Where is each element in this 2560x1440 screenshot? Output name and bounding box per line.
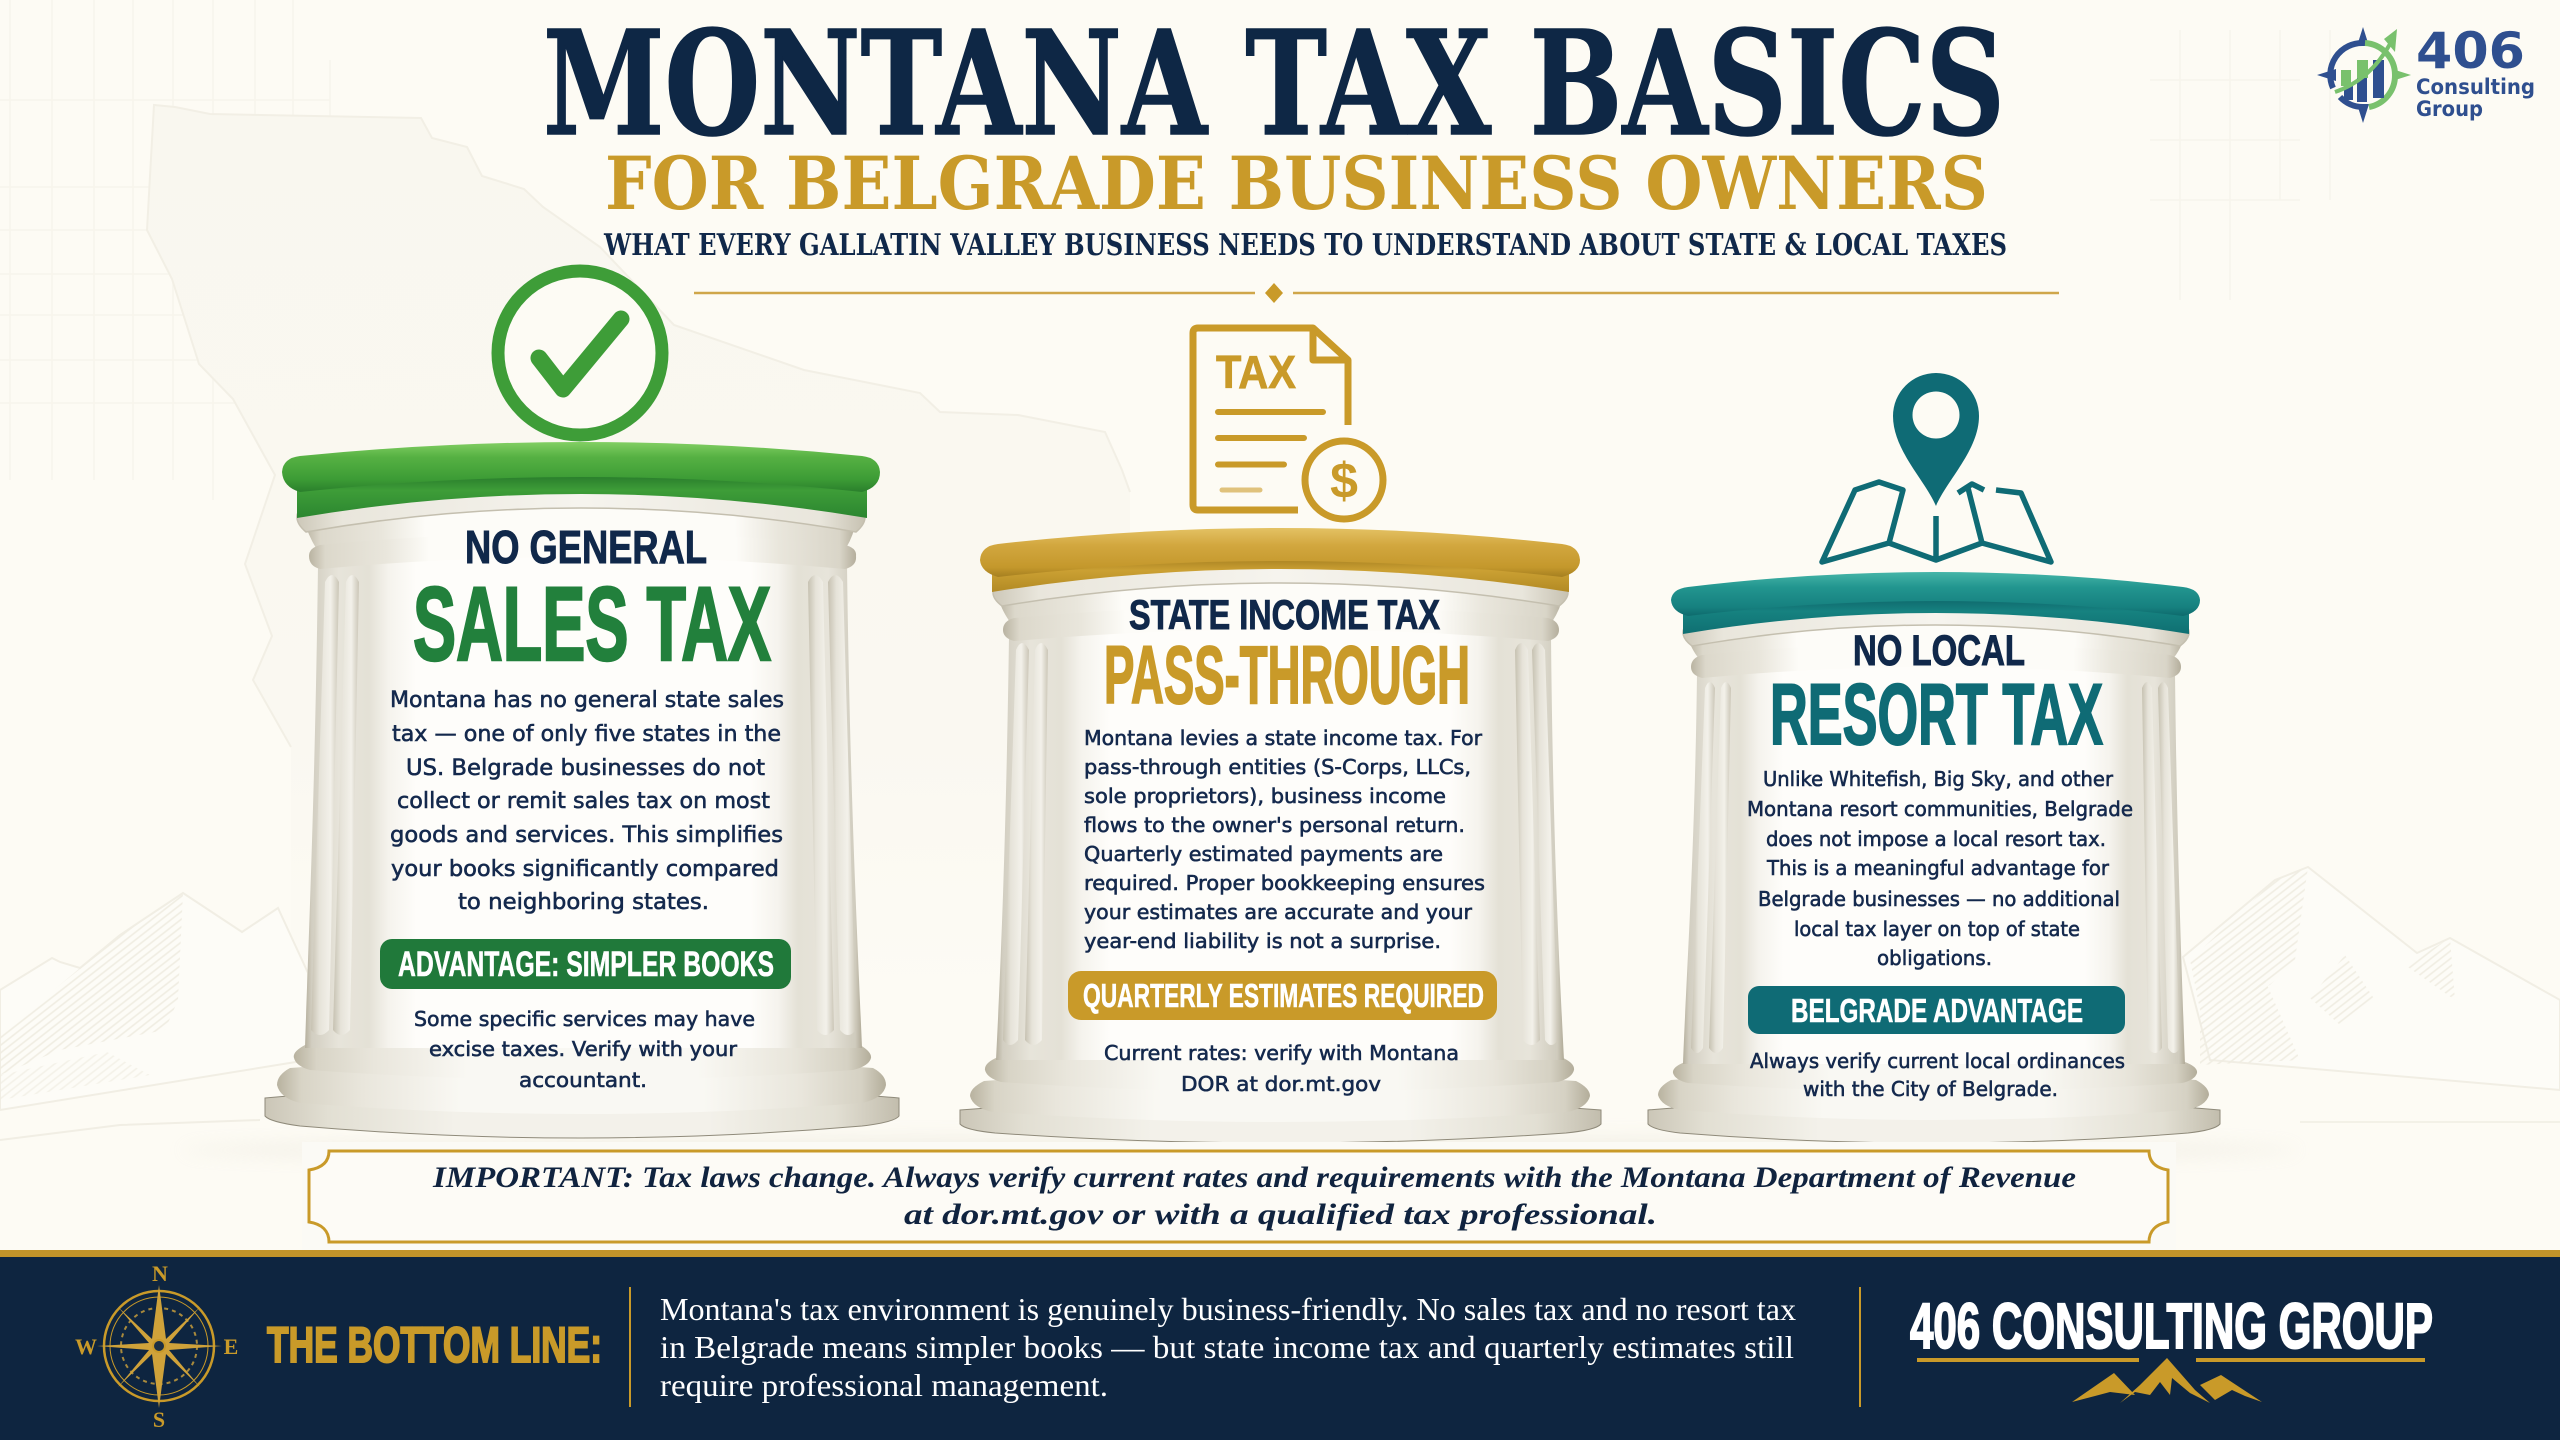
- body text: Montana has no general state sales: [390, 687, 784, 713]
- panel: state income tax pass-through: [960, 328, 1601, 1143]
- footnote: [1104, 1041, 1459, 1096]
- body text: [1747, 767, 2133, 970]
- logo wordmark: Consulting: [2416, 75, 2535, 99]
- body text: Unlike Whitefish, Big Sky, and other: [1763, 767, 2114, 791]
- icon: tax document with dollar coin: $: [1330, 453, 1358, 509]
- badge: [1748, 986, 2125, 1034]
- body text: tax — one of only five states in the: [392, 721, 781, 747]
- logo wordmark: Group: [2416, 97, 2483, 121]
- summary text: Montana's tax environment is genuinely business-friendly. No sales tax and no resort tax: [660, 1291, 1796, 1327]
- highlight title: PASS-THROUGH: [1104, 630, 1470, 721]
- body text: year-end liability is not a surprise.: [1084, 929, 1441, 953]
- bottom line label: THE BOTTOM LINE:: [267, 1317, 602, 1373]
- footnote: [1750, 1049, 2125, 1101]
- footnote: Always verify current local ordinances: [1750, 1049, 2125, 1073]
- ornamental divider: [694, 283, 2059, 303]
- icon: compass rose: [75, 1261, 238, 1432]
- ground shadows: [180, 1136, 2300, 1164]
- heading: NO GENERAL: [465, 521, 707, 573]
- body text: [1084, 726, 1485, 953]
- badge: [380, 939, 791, 989]
- background: left mountains: [0, 893, 308, 1140]
- column structure: [960, 566, 1601, 1143]
- body text: [390, 687, 784, 915]
- body text: local tax layer on top of state: [1794, 917, 2080, 941]
- footnote: excise taxes. Verify with your: [429, 1037, 738, 1061]
- heading: NO LOCAL: [1853, 627, 2025, 675]
- badge: [1068, 971, 1497, 1020]
- badge: BELGRADE ADVANTAGE: [1791, 992, 2083, 1029]
- column structure: [265, 490, 899, 1138]
- logo wordmark: 406: [2416, 22, 2525, 80]
- tagline: WHAT EVERY GALLATIN VALLEY BUSINESS NEEDS TO UNDERSTAND ABOUT STATE & LOCAL TAXES: [603, 228, 2007, 263]
- body text: This is a meaningful advantage for: [1766, 856, 2110, 880]
- body text: Montana levies a state income tax. For: [1084, 726, 1483, 750]
- body text: Montana resort communities, Belgrade: [1747, 797, 2133, 821]
- footer band: [0, 1250, 2560, 1440]
- body text: obligations.: [1877, 946, 1992, 970]
- column structure: [1648, 608, 2220, 1143]
- title: MONTANA TAX BASICS: [543, 0, 2005, 168]
- icon: compass rose: S: [153, 1407, 165, 1432]
- background: right mountains: [2183, 867, 2560, 1122]
- brand wordmark with mountains: [1910, 1290, 2433, 1403]
- body text: to neighboring states.: [458, 889, 709, 915]
- logo: 406 Consulting Group: [2317, 22, 2535, 123]
- footnote: Some specific services may have: [414, 1007, 755, 1031]
- logo wordmark: [2416, 22, 2535, 121]
- footnote: DOR at dor.mt.gov: [1181, 1072, 1381, 1096]
- summary text: [629, 1287, 1861, 1407]
- icon: compass rose: E: [224, 1334, 238, 1359]
- panel: no general sales tax: [265, 271, 899, 1138]
- body text: Belgrade businesses — no additional: [1758, 887, 2120, 911]
- icon: compass rose: W: [75, 1334, 97, 1359]
- body text: your estimates are accurate and your: [1084, 900, 1473, 924]
- icon: compass with growth chart: [2317, 27, 2411, 123]
- highlight title: SALES TAX: [413, 566, 771, 683]
- body text: sole proprietors), business income: [1084, 784, 1446, 808]
- callout: important notice: at dor.mt.gov or with a qualified tax professional.: [904, 1198, 1657, 1231]
- highlight title: RESORT TAX: [1770, 667, 2103, 763]
- body text: required. Proper bookkeeping ensures: [1084, 871, 1485, 895]
- subtitle: FOR BELGRADE BUSINESS OWNERS: [605, 141, 1988, 227]
- summary text: require professional management.: [660, 1367, 1108, 1403]
- summary text: in Belgrade means simpler books — but state income tax and quarterly estimates still: [660, 1329, 1794, 1365]
- body text: does not impose a local resort tax.: [1766, 827, 2106, 851]
- body text: collect or remit sales tax on most: [397, 788, 770, 814]
- badge: QUARTERLY ESTIMATES REQUIRED: [1083, 977, 1484, 1014]
- badge: ADVANTAGE: SIMPLER BOOKS: [398, 945, 774, 984]
- icon: check mark in circle: [498, 271, 662, 435]
- footnote: Current rates: verify with Montana: [1104, 1041, 1459, 1065]
- footnote: accountant.: [519, 1068, 647, 1092]
- icon: compass rose: N: [152, 1261, 168, 1286]
- column cap: teal: [1671, 572, 2200, 634]
- column cap: gold: [980, 528, 1580, 592]
- icon: tax document with dollar coin: [1193, 328, 1383, 519]
- body text: your books significantly compared: [391, 856, 779, 882]
- body text: US. Belgrade businesses do not: [406, 755, 765, 781]
- footnote: with the City of Belgrade.: [1803, 1077, 2058, 1101]
- body text: flows to the owner's personal return.: [1084, 813, 1465, 837]
- callout: important notice: IMPORTANT: Tax laws change. Always verify current rates and requirements with the Montana Department of Revenue: [432, 1161, 2076, 1194]
- footnote: [414, 1007, 755, 1092]
- body text: Quarterly estimated payments are: [1084, 842, 1443, 866]
- panel: no local resort tax: [1648, 373, 2220, 1143]
- body text: goods and services. This simplifies: [390, 822, 783, 848]
- callout: important notice: [302, 1142, 2176, 1250]
- column cap: green: [282, 442, 880, 518]
- icon: map with location pin: [1822, 373, 2051, 562]
- heading: STATE INCOME TAX: [1129, 591, 1440, 638]
- body text: pass-through entities (S-Corps, LLCs,: [1084, 755, 1471, 779]
- background: Montana map silhouette: [147, 105, 1130, 1000]
- icon: tax document with dollar coin: TAX: [1216, 346, 1296, 398]
